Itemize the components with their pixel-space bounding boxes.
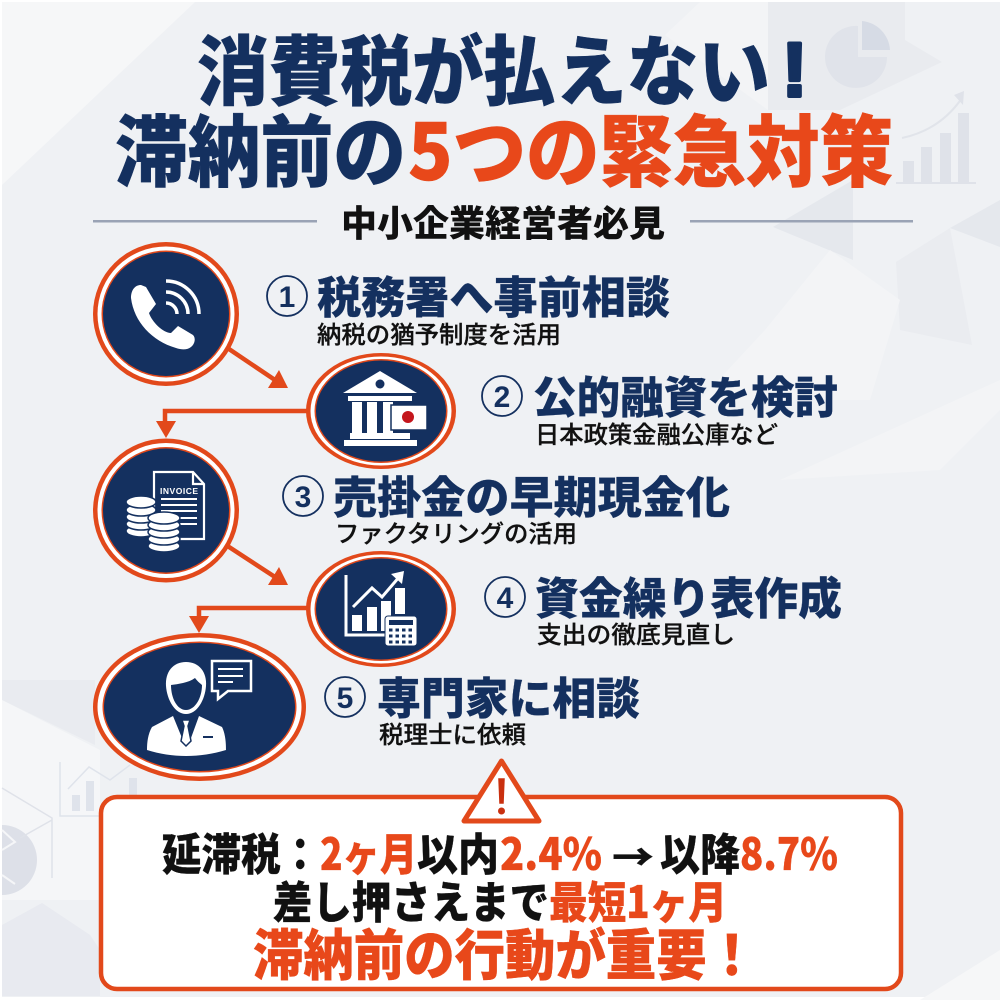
icon: phone <box>93 242 239 386</box>
step 1: 1 <box>279 281 295 314</box>
warning line 1: 以内 <box>417 819 499 883</box>
step 5 <box>325 663 640 750</box>
warning line 2: 最短1ヶ月 <box>549 867 727 931</box>
icon: invoice and coins <box>93 438 239 582</box>
step 2 <box>482 362 838 450</box>
step 4 <box>485 563 842 650</box>
background icon: small chart <box>60 762 137 816</box>
icon: bank with flag <box>306 353 456 469</box>
step 4: 4 <box>497 582 514 615</box>
step 3: 売掛金の早期現金化 <box>333 462 730 526</box>
background icon: bar chart <box>896 91 976 184</box>
icon: consultant with speech bubble <box>93 633 306 781</box>
warning line 1: → <box>612 829 654 881</box>
step 3: 3 <box>295 481 311 514</box>
warning line 1: 延滞税： <box>162 819 320 883</box>
step 3 <box>283 462 730 549</box>
step 2: 日本政策金融公庫など <box>535 415 778 450</box>
warning line 2 <box>273 867 727 931</box>
subtitle with rules: 中小企業経営者必見 <box>341 195 665 247</box>
icon: chart and calculator <box>306 551 456 667</box>
callout box <box>101 761 901 991</box>
title <box>115 11 893 203</box>
title line 2 orange: 5つの緊急対策 <box>408 91 893 203</box>
arrow: step 4 to 5 <box>189 608 308 633</box>
step 4: 資金繰り表作成 <box>535 563 842 627</box>
step 1 <box>267 262 670 350</box>
step 4: 支出の徹底見直し <box>537 615 735 650</box>
step 5: 5 <box>337 682 353 715</box>
step 2: 公的融資を検討 <box>533 362 838 426</box>
arrow: step 2 to 3 <box>156 411 308 438</box>
step 5: 税理士に依頼 <box>379 715 526 750</box>
title line 1: 消費税が払えない <box>197 11 770 121</box>
step 2: 2 <box>494 381 510 414</box>
title line 2 navy: 滞納前の <box>115 91 406 203</box>
arrow: step 3 to 4 <box>226 545 288 585</box>
warning line 1: 8.7% <box>740 819 838 883</box>
step 5: 専門家に相談 <box>377 663 640 727</box>
warning line 2: 差し押さえまで <box>273 867 549 931</box>
warning line 1: 2.4% <box>500 819 602 883</box>
icon: invoice and coins: INVOICE <box>160 486 198 496</box>
title exclamation: ! <box>782 28 807 113</box>
warning line 1: 以降 <box>660 819 740 883</box>
arrow: step 1 to 2 <box>226 347 288 388</box>
step 1: 税務署へ事前相談 <box>317 262 670 326</box>
step 1: 納税の猶予制度を活用 <box>317 315 561 350</box>
icon: warning triangle <box>464 761 539 821</box>
warning line 1 <box>162 819 838 883</box>
step 3: ファクタリングの活用 <box>335 514 577 549</box>
warning line 3: 滞納前の行動が重要！ <box>253 911 757 991</box>
background icon: pie chart <box>825 21 890 88</box>
warning line 1: 2ヶ月 <box>320 819 417 883</box>
background icon: left pie <box>2 788 52 895</box>
